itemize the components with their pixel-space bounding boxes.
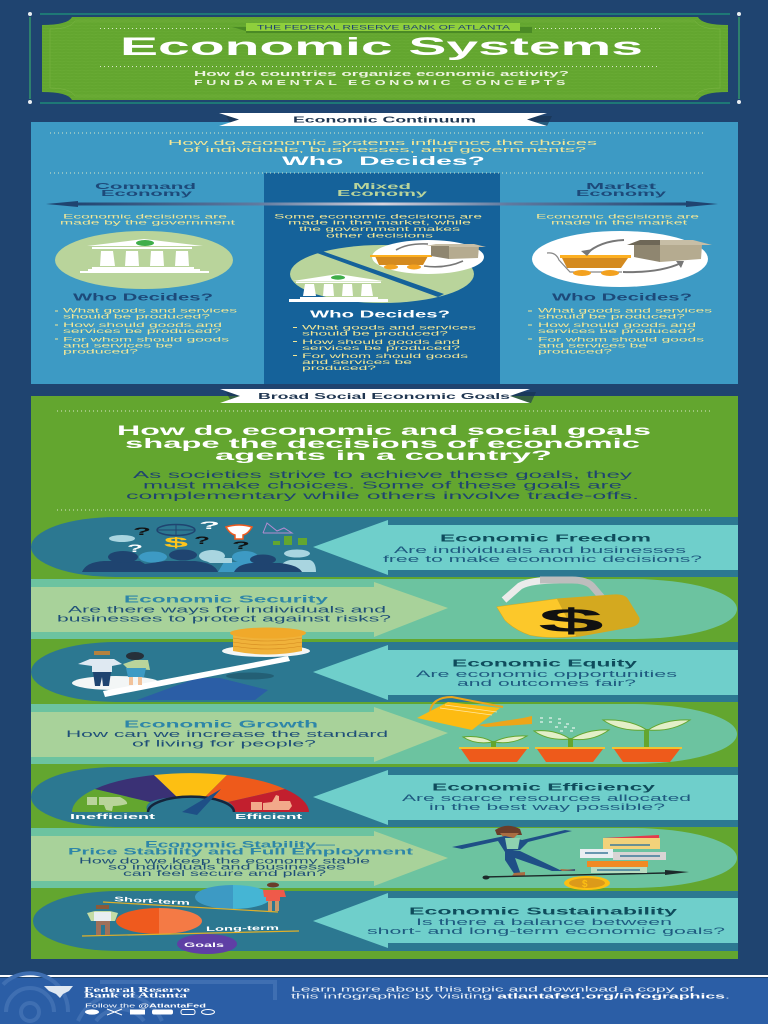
column: market economy: and services be <box>538 342 647 350</box>
icon: woman balancing on arrow with buildings and coin: $ <box>582 879 588 890</box>
goals intro text: must make choices. Some of these goals are <box>143 480 622 492</box>
panel: economic continuum <box>31 122 738 384</box>
icon: watering can and seedlings <box>417 697 690 762</box>
goals heading: How do economic and social goals <box>117 423 651 438</box>
goals intro text: As societies strive to achieve these goals, they <box>133 469 634 481</box>
column: mixed economy: other decisions <box>326 232 434 240</box>
column: mixed economy: the government makes <box>299 226 461 233</box>
column: command economy: produced? <box>63 348 139 356</box>
row: economic security: businesses to protect against risks? <box>57 614 391 624</box>
icon: people and questions: ? <box>232 540 251 552</box>
row: economic equity <box>31 628 738 702</box>
column: mixed economy <box>274 181 486 372</box>
column: command economy: services be produced? <box>63 328 221 335</box>
row: economic sustainability: Economic Sustainability <box>409 906 677 918</box>
column: mixed economy: made in the market, while <box>288 220 471 226</box>
footer: organisation name <box>84 986 190 1000</box>
column: mixed economy: Economy <box>337 188 428 198</box>
icon: people and questions <box>82 520 316 572</box>
column: command economy: What goods and services <box>63 308 238 314</box>
header banner <box>28 12 741 104</box>
column: command economy: How should goods and <box>63 322 222 329</box>
column: market economy: Economic decisions are <box>536 214 699 220</box>
row: economic equity: Are economic opportunities <box>416 669 678 679</box>
column: command economy: Who Decides? <box>73 292 213 304</box>
footer: learn more text: Learn more about this topic and download a copy of <box>291 984 696 994</box>
column: market economy: services be produced? <box>538 328 695 335</box>
ribbon: publisher <box>232 23 532 33</box>
footer: organisation name: Bank of Atlanta <box>84 992 188 1000</box>
icon: federal reserve eagle logo <box>44 986 73 998</box>
question heading: of individuals, businesses, and governments? <box>183 145 586 154</box>
footer: organisation name: Federal Reserve <box>84 986 190 994</box>
column: mixed economy: should be produced? <box>302 330 448 338</box>
ribbon: publisher: THE FEDERAL RESERVE BANK OF ATLANTA <box>257 24 511 32</box>
subtitle: FUNDAMENTAL ECONOMIC CONCEPTS <box>194 78 569 87</box>
goals heading: agents in a country? <box>215 448 552 463</box>
row: economic freedom <box>31 517 738 577</box>
footer: learn more text: this infographic by visiting atlantafed.org/infographics . <box>291 992 730 1000</box>
row: economic efficiency <box>31 767 738 827</box>
column: mixed economy: What goods and services <box>302 324 477 332</box>
row: economic stability: Economic Stability— <box>145 840 336 850</box>
column: mixed economy: services be produced? <box>302 345 460 352</box>
column: market economy: Economy <box>576 188 667 198</box>
row: economic growth: How can we increase the standard <box>66 729 388 739</box>
icon: mixed building and market <box>289 240 486 303</box>
row: economic growth: Economic Growth <box>124 718 318 730</box>
question heading: How do economic systems influence the choices <box>168 138 598 147</box>
row: economic stability: so individuals and businesses <box>108 862 345 872</box>
icon: balance of short and long term goals <box>82 882 299 954</box>
column: market economy: What goods and services <box>538 308 713 314</box>
column: mixed economy: Mixed <box>353 181 411 191</box>
goals intro text: complementary while others involve trade-offs. <box>126 490 639 502</box>
row: economic stability: Price Stability and Full Employment <box>68 846 415 858</box>
column: command economy: and services be <box>63 342 173 350</box>
column: mixed economy: and services be <box>302 359 412 366</box>
row: economic security: Economic Security <box>124 594 328 606</box>
row: economic equity: and outcomes fair? <box>457 678 636 688</box>
column: command economy: Economy <box>101 188 193 198</box>
column: market economy: How should goods and <box>538 322 696 329</box>
row: economic freedom: Are individuals and businesses <box>394 545 687 555</box>
icon: cart and box <box>532 231 712 287</box>
row: economic sustainability: short- and long-term economic goals? <box>367 926 725 936</box>
column: market economy: Who Decides? <box>552 292 692 304</box>
column: command economy: Command <box>95 181 196 191</box>
row: economic stability: How do we keep the economy stable <box>79 856 371 866</box>
footer: learn more text <box>291 984 730 1000</box>
column: mixed economy: For whom should goods <box>302 353 469 360</box>
icon: seesaw of people and coins <box>72 628 310 700</box>
icon: people and questions: ? <box>127 543 144 555</box>
footer: social handle: Follow the @AtlantaFed <box>85 1004 206 1010</box>
column: market economy: made in the market <box>551 220 687 226</box>
column: market economy: should be produced? <box>538 314 685 320</box>
column: mixed economy: Who Decides? <box>310 310 450 320</box>
row: economic growth <box>31 697 737 764</box>
row: economic growth: of living for people? <box>132 738 316 748</box>
column: market economy <box>528 181 713 356</box>
icon: woman balancing on arrow with buildings and coin <box>452 826 689 890</box>
column: command economy: Economic decisions are <box>63 214 227 220</box>
icon: people and questions: ? <box>199 520 221 532</box>
column: mixed economy: How should goods and <box>302 339 460 346</box>
subtitle <box>194 69 570 87</box>
icon: balance of short and long term goals: Short-term <box>114 896 191 907</box>
question heading: Who Decides? <box>282 154 485 168</box>
column: command economy: made by the government <box>60 220 235 226</box>
column: command economy: For whom should goods <box>63 336 230 344</box>
row: economic sustainability: Is there a balance between <box>416 917 672 927</box>
goals heading: shape the decisions of economic <box>125 436 641 451</box>
icons: social media <box>85 1009 214 1015</box>
row: economic freedom: Economic Freedom <box>440 532 651 544</box>
icon: government building <box>55 231 233 289</box>
icon: people and questions: ? <box>194 535 211 547</box>
subtitle: How do countries organize economic activity? <box>194 69 570 78</box>
icon: padlock: $ <box>538 602 604 639</box>
ribbon: economic continuum: Economic Continuum <box>293 116 476 124</box>
row: economic stability: can feel secure and plan? <box>123 869 327 878</box>
ribbon: economic continuum <box>219 113 552 126</box>
icon: balance of short and long term goals: Long-term <box>206 925 280 933</box>
column: mixed economy: produced? <box>302 365 377 372</box>
panel: broad social economic goals <box>31 396 738 959</box>
goals intro text <box>126 469 639 502</box>
row: economic sustainability <box>33 882 738 954</box>
icon: people and questions: $ <box>164 534 189 550</box>
icon: balance of short and long term goals: Goals <box>184 942 225 949</box>
column: mixed economy: Some economic decisions are <box>274 214 482 220</box>
column: market economy: Market <box>586 181 656 191</box>
icon: people and questions: ? <box>133 526 152 538</box>
row: economic efficiency: in the best way possible? <box>429 802 665 812</box>
goals heading <box>117 423 651 463</box>
column: market economy: produced? <box>538 348 613 356</box>
row: economic security: Are there ways for individuals and <box>68 604 386 614</box>
question heading <box>168 138 598 168</box>
chart: efficiency gauge: Inefficient <box>70 812 156 821</box>
chart: efficiency gauge <box>70 773 309 821</box>
arrow: continuum <box>46 201 718 207</box>
footer <box>0 973 768 1024</box>
row: economic efficiency: Economic Efficiency <box>432 782 655 794</box>
ribbon: broad social economic goals: Broad Social Economic Goals <box>258 392 511 401</box>
column: command economy <box>55 181 238 356</box>
column: command economy: should be produced? <box>63 314 210 320</box>
row: economic equity: Economic Equity <box>452 658 637 670</box>
row: economic stability <box>31 826 737 890</box>
ribbon: broad social economic goals <box>220 389 536 403</box>
column: market economy: For whom should goods <box>538 336 705 344</box>
row: economic security <box>31 579 737 639</box>
title: Economic Systems <box>120 33 643 61</box>
row: economic freedom: free to make economic decisions? <box>383 554 702 564</box>
row: economic efficiency: Are scarce resources allocated <box>402 793 691 803</box>
chart: efficiency gauge: Efficient <box>235 812 303 821</box>
icon: padlock <box>497 580 639 639</box>
